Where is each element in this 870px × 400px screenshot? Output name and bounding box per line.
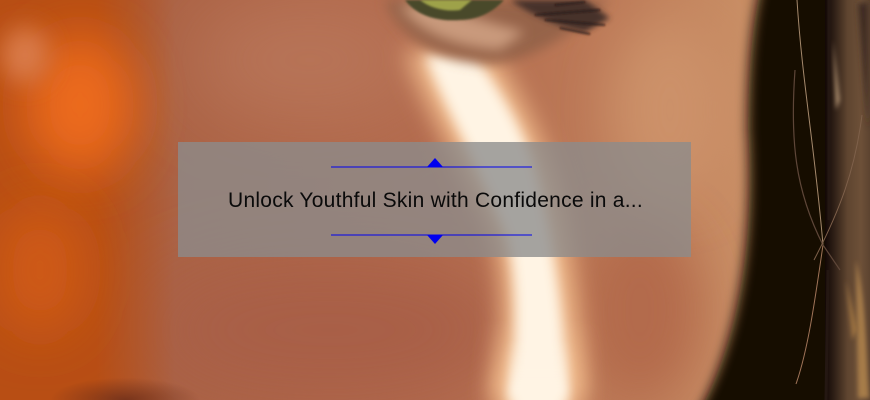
- dark background beyond the face: [705, 0, 870, 400]
- heading: Unlock Youthful Skin with Confidence in a...: [228, 189, 643, 212]
- title panel: [178, 142, 691, 257]
- streak of light: [405, 45, 585, 400]
- warm cheek shading: [140, 0, 730, 400]
- top ornament: line with upward triangle: [331, 158, 532, 168]
- blurred orange foreground: [0, 0, 200, 400]
- eyelid and eye: [385, 0, 610, 64]
- hair strands: [793, 0, 870, 400]
- bottom ornament: line with downward triangle: [331, 234, 532, 244]
